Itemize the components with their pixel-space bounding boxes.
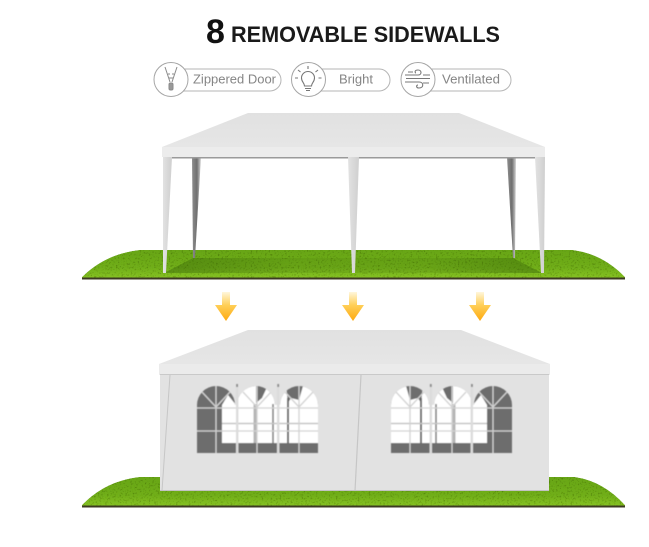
feature badge: ventilated: Ventilated bbox=[442, 72, 500, 86]
window: left bbox=[197, 384, 319, 454]
tent roof bbox=[159, 330, 550, 375]
sidewalls bbox=[160, 375, 549, 491]
tent roof bbox=[162, 113, 545, 157]
feature badge: bright bbox=[292, 62, 390, 96]
front tent legs bbox=[163, 157, 545, 273]
icon: zipper bbox=[165, 67, 177, 90]
arrow: left bbox=[215, 292, 237, 321]
feature badge: zippered door bbox=[154, 62, 281, 96]
open tent on grass bbox=[82, 113, 625, 280]
window divider poles bbox=[236, 384, 279, 454]
rear rail bbox=[172, 156, 535, 158]
grass lawn: top bbox=[82, 250, 625, 280]
icon: wind bbox=[405, 70, 430, 88]
icon: light bulb bbox=[295, 66, 322, 90]
feature badge: ventilated bbox=[401, 62, 511, 96]
title: REMOVABLE SIDEWALLS bbox=[231, 22, 500, 47]
tent shadow on grass bbox=[164, 258, 542, 273]
enclosed tent on grass bbox=[82, 330, 625, 508]
title bbox=[206, 13, 500, 51]
feature badge: zippered door: Zippered Door bbox=[193, 72, 277, 86]
feature badge: bright: Bright bbox=[339, 72, 373, 86]
arrow: center bbox=[342, 292, 364, 321]
title: 8 bbox=[206, 13, 225, 51]
rear tent legs bbox=[192, 157, 516, 258]
window: right bbox=[390, 384, 512, 454]
grass lawn: bottom bbox=[82, 477, 625, 508]
arrow: right bbox=[469, 292, 491, 321]
